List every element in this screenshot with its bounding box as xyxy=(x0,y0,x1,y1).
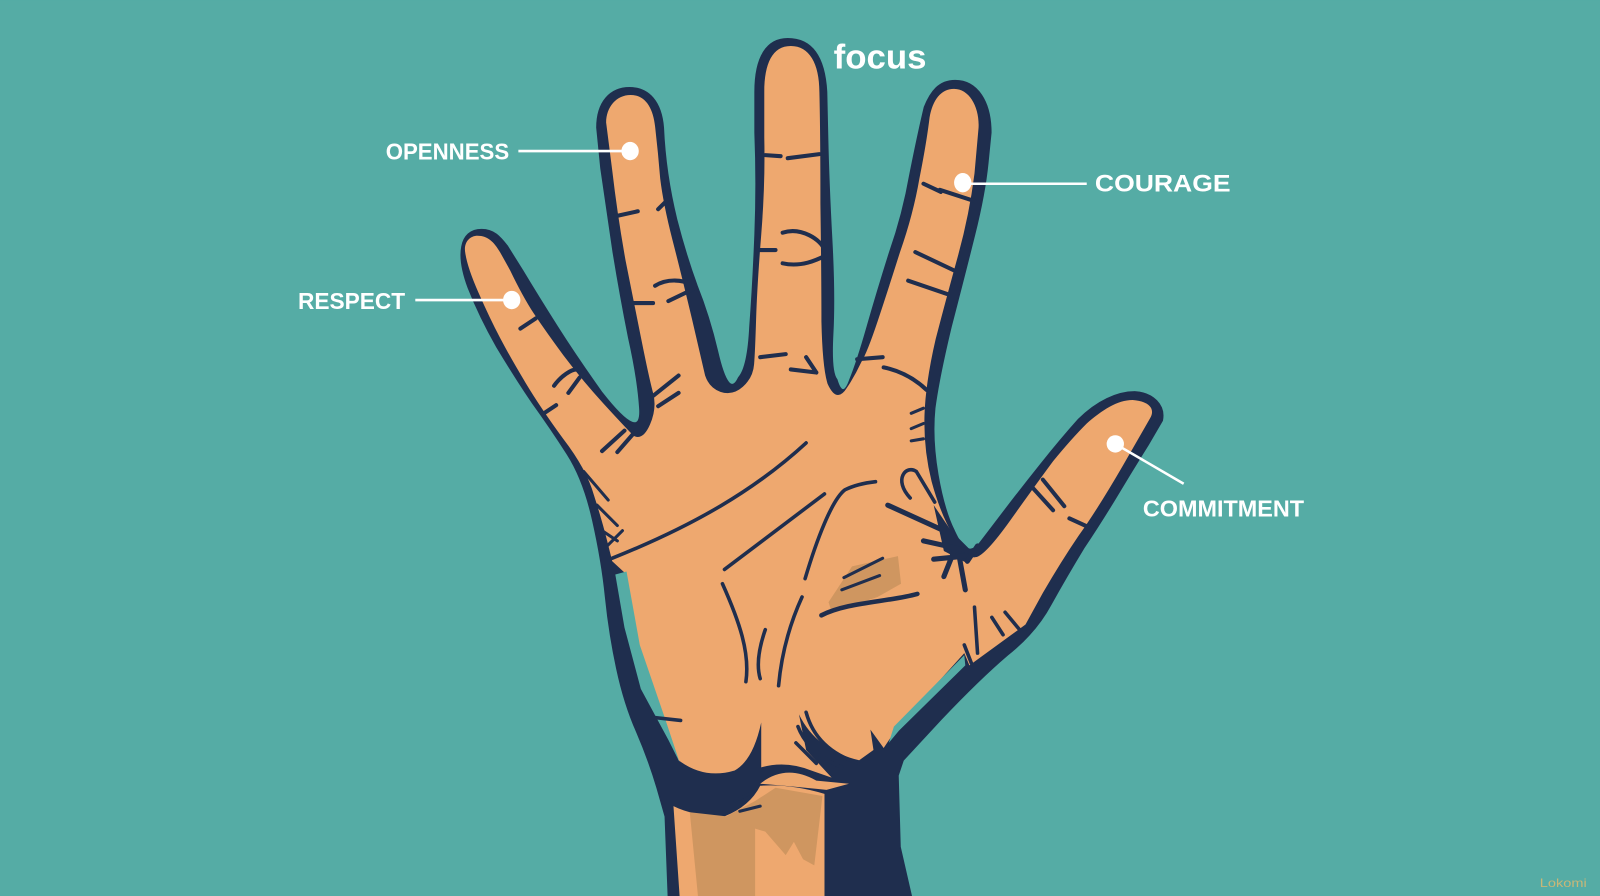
head line xyxy=(724,494,824,569)
commitment text: COMMITMENT xyxy=(1143,495,1305,521)
commitment leader line xyxy=(1115,444,1184,484)
wrist side nick xyxy=(653,717,681,720)
courage text: COURAGE xyxy=(1095,170,1231,197)
hand outline silhouette xyxy=(461,39,1163,896)
openness text: OPENNESS xyxy=(386,139,509,165)
palm creases xyxy=(612,443,917,767)
thumb joint lines xyxy=(1033,480,1092,529)
palm and fingers fill xyxy=(465,46,1152,778)
thumb mound creases xyxy=(821,594,917,615)
web notch blob xyxy=(934,505,980,563)
courage dot xyxy=(954,173,971,192)
hook crease xyxy=(902,470,935,502)
wrist creases xyxy=(796,712,859,767)
courage leader line xyxy=(962,182,1087,185)
label: openness xyxy=(386,139,639,165)
finger creases xyxy=(520,154,974,546)
openness leader line xyxy=(518,150,630,152)
label: respect xyxy=(298,288,520,314)
commitment dot xyxy=(1107,435,1124,453)
lower creases xyxy=(722,584,802,686)
life line xyxy=(805,482,876,579)
thumb web spikes xyxy=(888,505,978,590)
forearm shadow xyxy=(690,788,822,896)
teal gap right of palm xyxy=(889,655,965,743)
respect leader line xyxy=(415,299,511,301)
respect text: RESPECT xyxy=(298,288,406,314)
palm edge spikes left xyxy=(584,471,622,546)
hand illustration xyxy=(461,39,1163,896)
respect dot xyxy=(503,291,520,309)
focus text: focus xyxy=(834,38,927,76)
thumb creases and web xyxy=(653,470,1092,720)
index finger creases xyxy=(857,184,974,390)
label: commitment xyxy=(1107,435,1305,521)
thumb mound shading xyxy=(829,556,901,612)
pinky creases xyxy=(520,318,638,452)
forearm xyxy=(673,773,849,896)
thumb mound spikes xyxy=(964,607,1020,663)
label: courage xyxy=(954,170,1231,197)
teal gap left of palm xyxy=(615,571,680,762)
heart line xyxy=(612,443,806,558)
middle finger creases xyxy=(760,154,827,372)
forearm light skin xyxy=(673,785,824,896)
openness dot xyxy=(621,142,639,160)
wrist band highlight xyxy=(760,773,849,790)
watermark: Lokomi xyxy=(1540,876,1587,890)
wrist crease strokes xyxy=(735,791,760,811)
ring finger creases xyxy=(610,199,694,406)
palm edge spikes right xyxy=(911,408,923,441)
